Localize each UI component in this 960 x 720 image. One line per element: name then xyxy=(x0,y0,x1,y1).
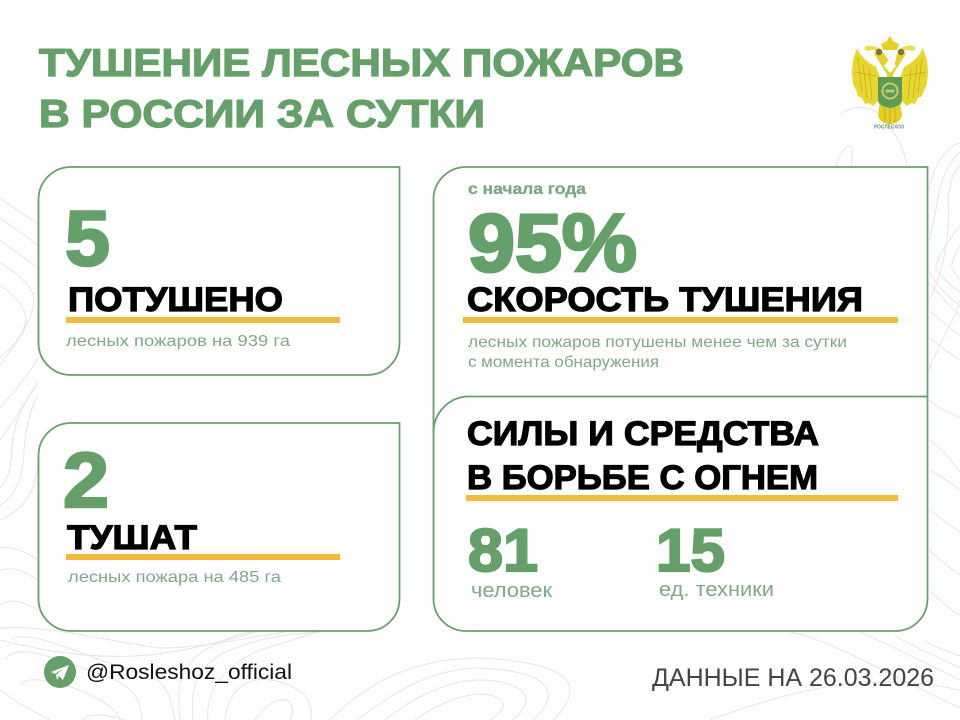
necks and heads xyxy=(874,50,906,82)
panel: being extinguished xyxy=(38,423,400,631)
scrolls xyxy=(865,46,915,54)
right wing xyxy=(900,48,928,106)
left wing xyxy=(852,48,880,106)
heading: СИЛЫ И СРЕДСТВА xyxy=(467,415,819,453)
title: В РОССИИ ЗА СУТКИ xyxy=(39,93,485,136)
shield xyxy=(878,77,902,108)
title: ТУШЕНИЕ ЛЕСНЫХ ПОЖАРОВ xyxy=(39,42,684,85)
description: лесных пожаров на 939 га xyxy=(66,333,290,350)
label: ПОТУШЕНО xyxy=(68,281,283,319)
heading xyxy=(467,415,819,497)
crown xyxy=(881,36,899,50)
big number 5: 5 xyxy=(65,194,110,282)
panel: speed xyxy=(434,167,928,631)
label: ТУШАТ xyxy=(67,519,197,557)
description: лесных пожаров потушены менее чем за сутки xyxy=(468,334,847,351)
panel: forces and means xyxy=(434,396,928,602)
stat: vehicles xyxy=(656,517,774,601)
eyebrow: с начала года xyxy=(468,181,586,198)
label: СКОРОСТЬ ТУШЕНИЯ xyxy=(467,281,863,319)
telegram handle: @Rosleshoz_official xyxy=(86,660,292,684)
icon: Rosleshoz emblem xyxy=(852,36,928,130)
underline xyxy=(66,317,340,323)
panel: extinguished xyxy=(38,167,400,375)
stat: people: 81 xyxy=(468,517,538,584)
description: с момента обнаружения xyxy=(468,354,659,371)
stat: people: человек xyxy=(471,580,552,602)
underline xyxy=(463,317,898,323)
title xyxy=(39,42,684,136)
description xyxy=(468,334,847,371)
tail and legs xyxy=(878,100,902,124)
stat: vehicles: 15 xyxy=(656,517,725,584)
date note: ДАННЫЕ НА 26.03.2026 xyxy=(652,664,934,692)
description: лесных пожара на 485 га xyxy=(68,569,281,586)
big number 2: 2 xyxy=(63,436,109,524)
stat: people xyxy=(468,517,552,602)
stat: vehicles: ед. техники xyxy=(659,579,774,601)
underline xyxy=(66,554,340,560)
big percent: 95% xyxy=(468,198,637,289)
icon: telegram xyxy=(44,656,76,688)
emblem caption: РОСЛЕСХОЗ xyxy=(874,124,904,130)
heading: В БОРЬБЕ С ОГНЕМ xyxy=(467,459,818,497)
underline xyxy=(466,495,898,501)
